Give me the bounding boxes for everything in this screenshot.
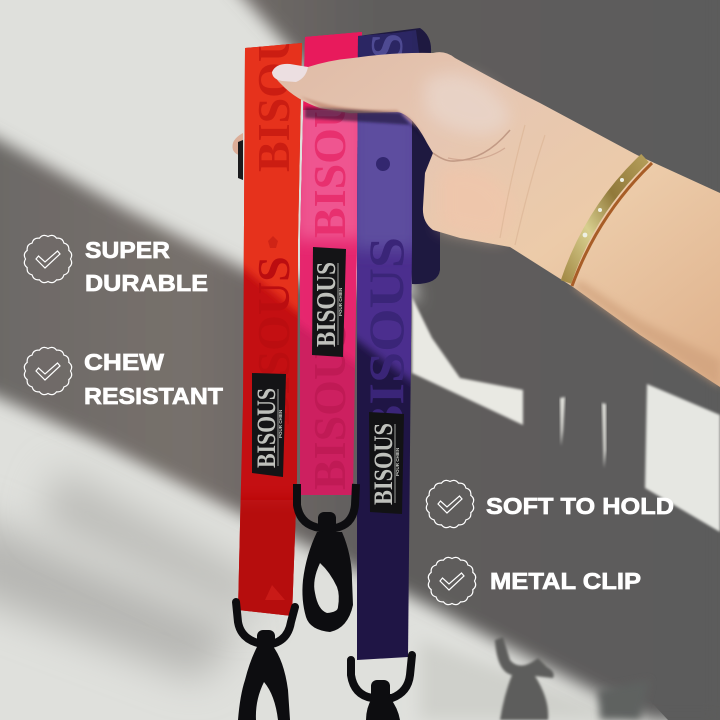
red leash strap: BISOUS [248,256,299,425]
wrist creases [500,125,545,245]
label text: DURABLE [85,270,208,296]
purple strap label: POUR CHIEN [395,448,400,476]
feature: chew resistant [24,347,223,409]
feature: super durable [24,235,208,296]
feature: metal clip [428,557,641,605]
label text: CHEW [84,349,164,375]
palm crease [433,130,510,161]
pink leash strap: BISOUS [304,321,355,490]
icon: badge check [428,557,476,605]
finger behind straps [232,133,243,155]
light slit shadows [560,397,565,446]
shadow under thumb [305,107,428,145]
pink strap label: BISOUS [311,262,341,347]
purple leash strap: US [361,33,412,92]
red strap woven text: BISOUS [248,3,299,172]
feature: soft to hold [426,480,674,528]
label text: RESISTANT [84,383,223,409]
pink leash strap [300,32,362,495]
pink strap label: POUR CHIEN [338,288,343,316]
strap back loop [358,28,440,284]
dark strap edge behind red [238,140,243,180]
icon: badge check [426,480,474,528]
purple leash strap [357,33,412,660]
red strap label: BISOUS [252,388,281,468]
label text: SUPER [85,237,170,263]
purple strap label: BISOUS [369,423,398,505]
pink strap woven text: BISOUS [304,69,355,238]
icon: badge check [24,235,72,283]
light patch: right [645,384,720,532]
hand shading [425,74,509,135]
gold bracelet [566,158,652,286]
red strap label: POUR CHIEN [278,410,283,438]
label text: SOFT TO HOLD [486,493,674,519]
label text: METAL CLIP [490,568,641,594]
hand and arm [272,52,720,387]
icon: badge check [24,347,72,395]
red strap clip [236,602,295,720]
red leash strap [238,43,302,616]
purple strap clip [351,655,412,720]
pink strap clip [297,484,356,632]
clip shadows on wall [495,637,554,720]
light patch: centre [412,297,523,425]
thumbnail [272,64,308,82]
purple strap woven text: BISOUS [358,237,414,442]
